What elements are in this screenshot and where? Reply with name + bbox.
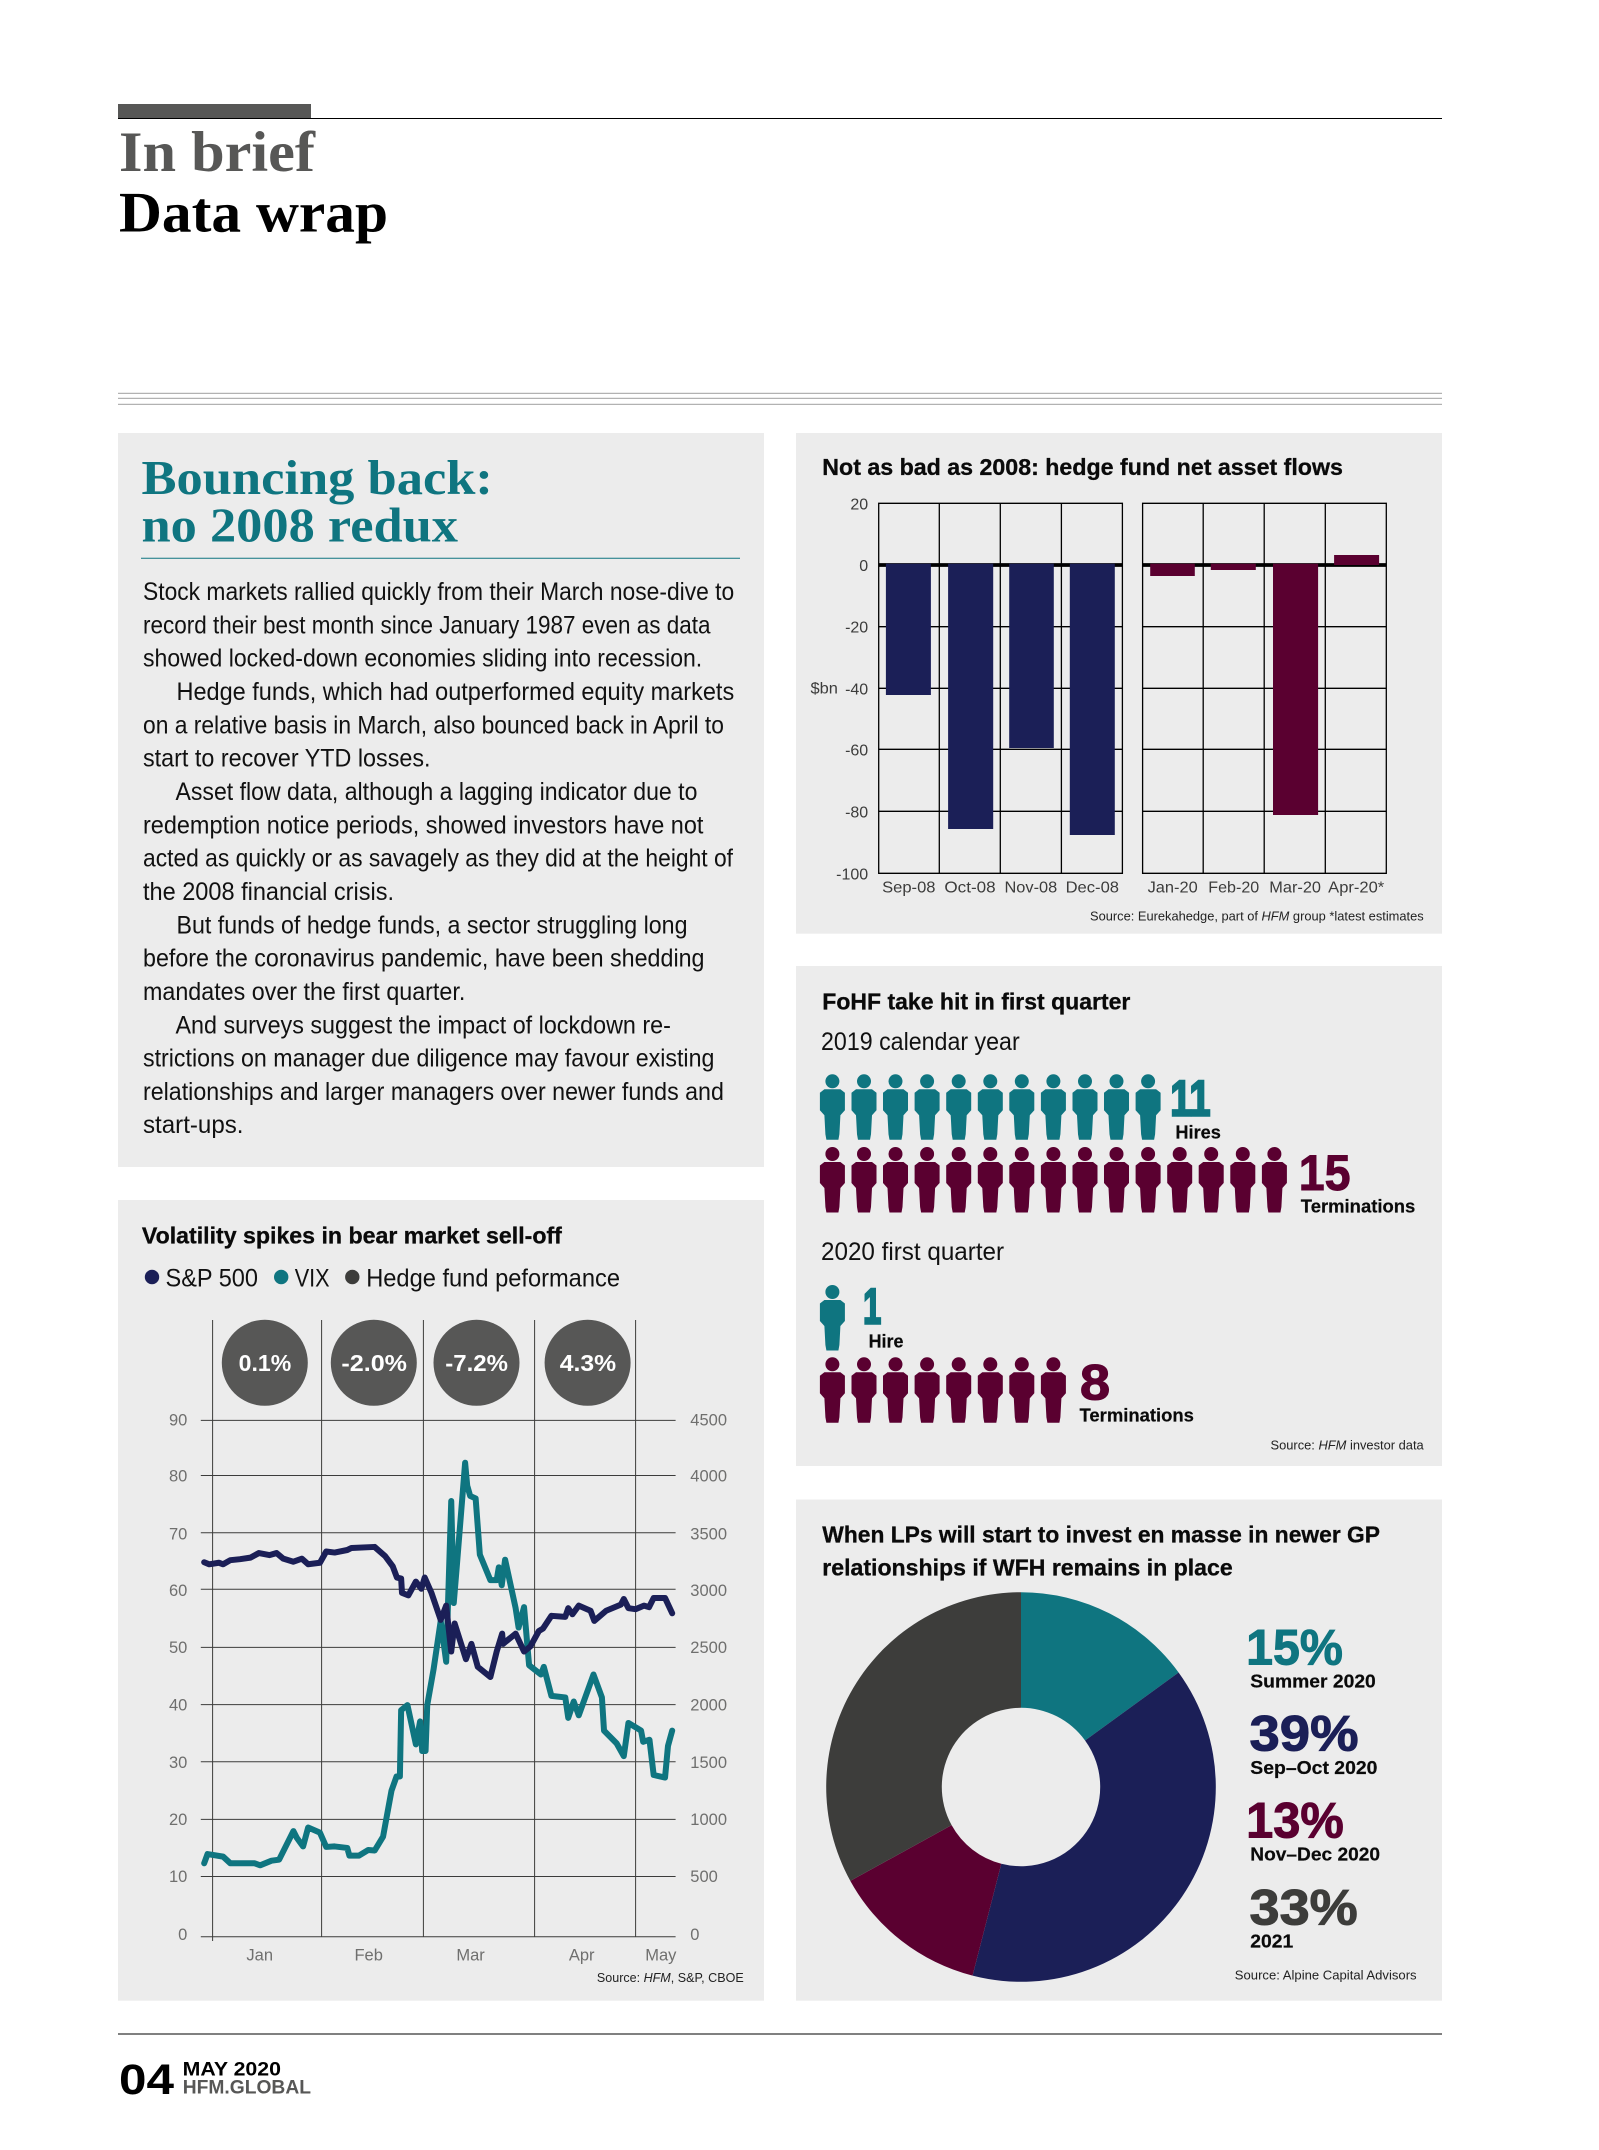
stat: 15 terminations xyxy=(1299,1145,1415,1217)
hedge fund performance bubbles: 0.1% xyxy=(239,1350,291,1376)
panel: hedge fund net asset flows bar chart xyxy=(796,433,1442,934)
bars: 2020 xyxy=(1150,555,1379,815)
stat: 39%: Sep–Oct 2020 xyxy=(1250,1758,1377,1778)
panel: Bouncing back article xyxy=(118,433,764,1167)
icon: 1 hire xyxy=(820,1285,845,1350)
y axis labels: -80 xyxy=(845,804,868,821)
chart title: When LPs will start to invest en masse in newer GP xyxy=(822,1521,1380,1547)
month labels: Feb xyxy=(354,1946,383,1964)
stat: 8 terminations: 8 xyxy=(1080,1354,1110,1410)
article body text: Hedge funds, which had outperformed equity markets xyxy=(176,678,734,706)
issue date: MAY 2020 xyxy=(183,2059,281,2081)
source note: Source: Alpine Capital Advisors xyxy=(1235,1967,1417,1982)
stat: 39%: 39% xyxy=(1250,1706,1358,1762)
icons: 11 hires xyxy=(820,1074,1161,1140)
right axis labels: 2500 xyxy=(690,1639,727,1657)
article body text: before the coronavirus pandemic, have been shedding xyxy=(143,945,704,973)
month labels: Apr xyxy=(569,1946,595,1964)
month labels xyxy=(246,1946,677,1964)
stat: 1 hire: Hire xyxy=(869,1332,904,1352)
icons: 8 terminations xyxy=(820,1357,1066,1423)
right axis labels: 3500 xyxy=(690,1525,727,1543)
article body text: But funds of hedge funds, a sector struggling long xyxy=(176,911,688,939)
article body text: start-ups. xyxy=(143,1111,244,1139)
article body text: showed locked-down economies sliding into recession. xyxy=(143,645,702,673)
footer xyxy=(118,2034,1442,2104)
source note: Source: HFM, S&P, CBOE xyxy=(597,1970,744,1985)
left axis labels: 70 xyxy=(169,1525,187,1543)
article heading xyxy=(142,452,493,553)
right axis labels xyxy=(690,1412,727,1944)
y axis labels xyxy=(836,496,868,883)
stat: 13%: Nov–Dec 2020 xyxy=(1250,1845,1380,1865)
page number: 04 xyxy=(119,2056,174,2104)
left axis labels: 30 xyxy=(169,1754,187,1772)
x axis labels xyxy=(882,879,1384,896)
chart gridlines xyxy=(201,1320,676,1941)
right axis labels: 1500 xyxy=(690,1754,727,1772)
chart title xyxy=(822,1521,1380,1580)
x axis labels: Nov-08 xyxy=(1004,879,1057,896)
legend: Hedge fund peformance xyxy=(366,1265,620,1293)
stat: 13%: 13% xyxy=(1246,1792,1344,1848)
chart title: Volatility spikes in bear market sell-off xyxy=(142,1222,562,1248)
right axis labels: 2000 xyxy=(690,1697,727,1715)
article body text: acted as quickly or as savagely as they did at the height of xyxy=(143,845,733,873)
stat: 11 hires: Hires xyxy=(1175,1122,1221,1142)
article body text: relationships and larger managers over newer funds and xyxy=(143,1078,724,1106)
chart title: FoHF take hit in first quarter xyxy=(822,988,1130,1014)
article body text: the 2008 financial crisis. xyxy=(143,878,394,906)
x axis labels: Apr-20* xyxy=(1328,879,1384,896)
subheading: 2019: 2019 calendar year xyxy=(821,1028,1020,1056)
icons: 15 terminations xyxy=(820,1147,1287,1212)
left axis labels: 40 xyxy=(169,1697,187,1715)
hedge fund performance bubbles xyxy=(222,1320,631,1406)
stat: 15%: Summer 2020 xyxy=(1250,1671,1376,1691)
stat: 15%: 15% xyxy=(1246,1619,1343,1675)
stat: 13% xyxy=(1246,1792,1380,1865)
stat: 33%: 2021 xyxy=(1250,1931,1293,1951)
x axis labels: Jan-20 xyxy=(1148,879,1198,896)
month labels: Mar xyxy=(456,1946,485,1964)
page title: Data wrap: Data wrap xyxy=(119,182,388,245)
y axis labels: 0 xyxy=(859,558,868,575)
right axis labels: 4500 xyxy=(690,1412,727,1430)
stat: 8 terminations: Terminations xyxy=(1080,1406,1194,1426)
left axis labels: 90 xyxy=(169,1412,187,1430)
y axis labels: 20 xyxy=(850,496,868,513)
left axis labels: 20 xyxy=(169,1811,187,1829)
section label: In brief: In brief xyxy=(119,121,316,184)
article body text: And surveys suggest the impact of lockdown re- xyxy=(176,1011,671,1039)
article body text: Stock markets rallied quickly from their March nose-dive to xyxy=(143,578,734,606)
left axis labels: 80 xyxy=(169,1468,187,1486)
month labels: Jan xyxy=(246,1946,273,1964)
article body text: strictions on manager due diligence may favour existing xyxy=(143,1045,714,1073)
chart title: relationships if WFH remains in place xyxy=(822,1554,1233,1580)
right axis labels: 0 xyxy=(690,1926,699,1944)
source note: Source: Eurekahedge, part of HFM group *latest estimates xyxy=(1090,909,1424,924)
left axis labels: 0 xyxy=(178,1926,187,1944)
right axis labels: 3000 xyxy=(690,1582,727,1600)
article body text: redemption notice periods, showed investors have not xyxy=(143,811,703,839)
left axis labels xyxy=(169,1412,187,1944)
x axis labels: Feb-20 xyxy=(1208,879,1259,896)
bar chart grid xyxy=(879,503,1386,873)
left axis labels: 50 xyxy=(169,1639,187,1657)
left axis labels: 10 xyxy=(169,1868,187,1886)
y axis labels: -20 xyxy=(845,619,868,636)
line: VIX xyxy=(204,1463,672,1865)
panel: Volatility line chart xyxy=(118,1200,764,2001)
article heading: Bouncing back: xyxy=(142,452,493,505)
left axis labels: 60 xyxy=(169,1582,187,1600)
x axis labels: Mar-20 xyxy=(1269,879,1321,896)
subheading: 2020: 2020 first quarter xyxy=(821,1238,1004,1266)
legend: S&P 500 xyxy=(166,1265,258,1293)
article body text: on a relative basis in March, also bounced back in April to xyxy=(143,711,724,739)
x axis labels: Sep-08 xyxy=(882,879,936,896)
y axis labels: -60 xyxy=(845,743,868,760)
website: HFM.GLOBAL xyxy=(183,2077,311,2099)
stat: 15 terminations: 15 xyxy=(1299,1145,1350,1201)
right axis labels: 4000 xyxy=(690,1468,727,1486)
stat: 1 hire xyxy=(863,1278,904,1352)
panel: FoHF hires and terminations pictogram xyxy=(796,966,1442,1466)
article body text: start to recover YTD losses. xyxy=(143,745,430,773)
right axis labels: 500 xyxy=(690,1868,718,1886)
stat: 8 terminations xyxy=(1080,1354,1194,1426)
legend: VIX xyxy=(295,1265,330,1293)
stat: 1 hire: 1 xyxy=(863,1278,881,1334)
line: S&P 500 xyxy=(204,1547,672,1677)
hedge fund performance bubbles: -2.0% xyxy=(341,1350,407,1376)
hedge fund performance bubbles: 4.3% xyxy=(560,1350,616,1376)
article body text: record their best month since January 1987 even as data xyxy=(143,611,711,639)
donut chart xyxy=(826,1592,1216,1982)
x axis labels: Oct-08 xyxy=(944,879,996,896)
stat: 11 hires: 11 xyxy=(1170,1071,1210,1127)
stat: 39% xyxy=(1250,1706,1377,1778)
article heading: no 2008 redux xyxy=(142,500,458,553)
stat: 15 terminations: Terminations xyxy=(1301,1197,1415,1217)
article body text: mandates over the first quarter. xyxy=(143,978,465,1006)
article body text: Asset flow data, although a lagging indicator due to xyxy=(176,778,697,806)
hedge fund performance bubbles: -7.2% xyxy=(445,1350,508,1376)
chart title: Not as bad as 2008: hedge fund net asset flows xyxy=(822,454,1343,480)
page header xyxy=(118,104,1442,245)
source note: Source: HFM investor data xyxy=(1270,1437,1424,1452)
bars: 2008 xyxy=(886,564,1115,835)
legend xyxy=(145,1265,620,1293)
month labels: May xyxy=(645,1946,677,1964)
article body text xyxy=(143,578,734,1139)
panel: LP investment timing donut chart xyxy=(796,1500,1442,2001)
right axis labels: 1000 xyxy=(690,1811,727,1829)
stat: 33%: 33% xyxy=(1250,1879,1358,1935)
y axis labels: -40 xyxy=(845,681,868,698)
x axis labels: Dec-08 xyxy=(1066,879,1119,896)
y axis labels: -100 xyxy=(836,866,868,883)
stat: 15% xyxy=(1246,1619,1376,1691)
y axis unit: $bn xyxy=(810,680,838,697)
